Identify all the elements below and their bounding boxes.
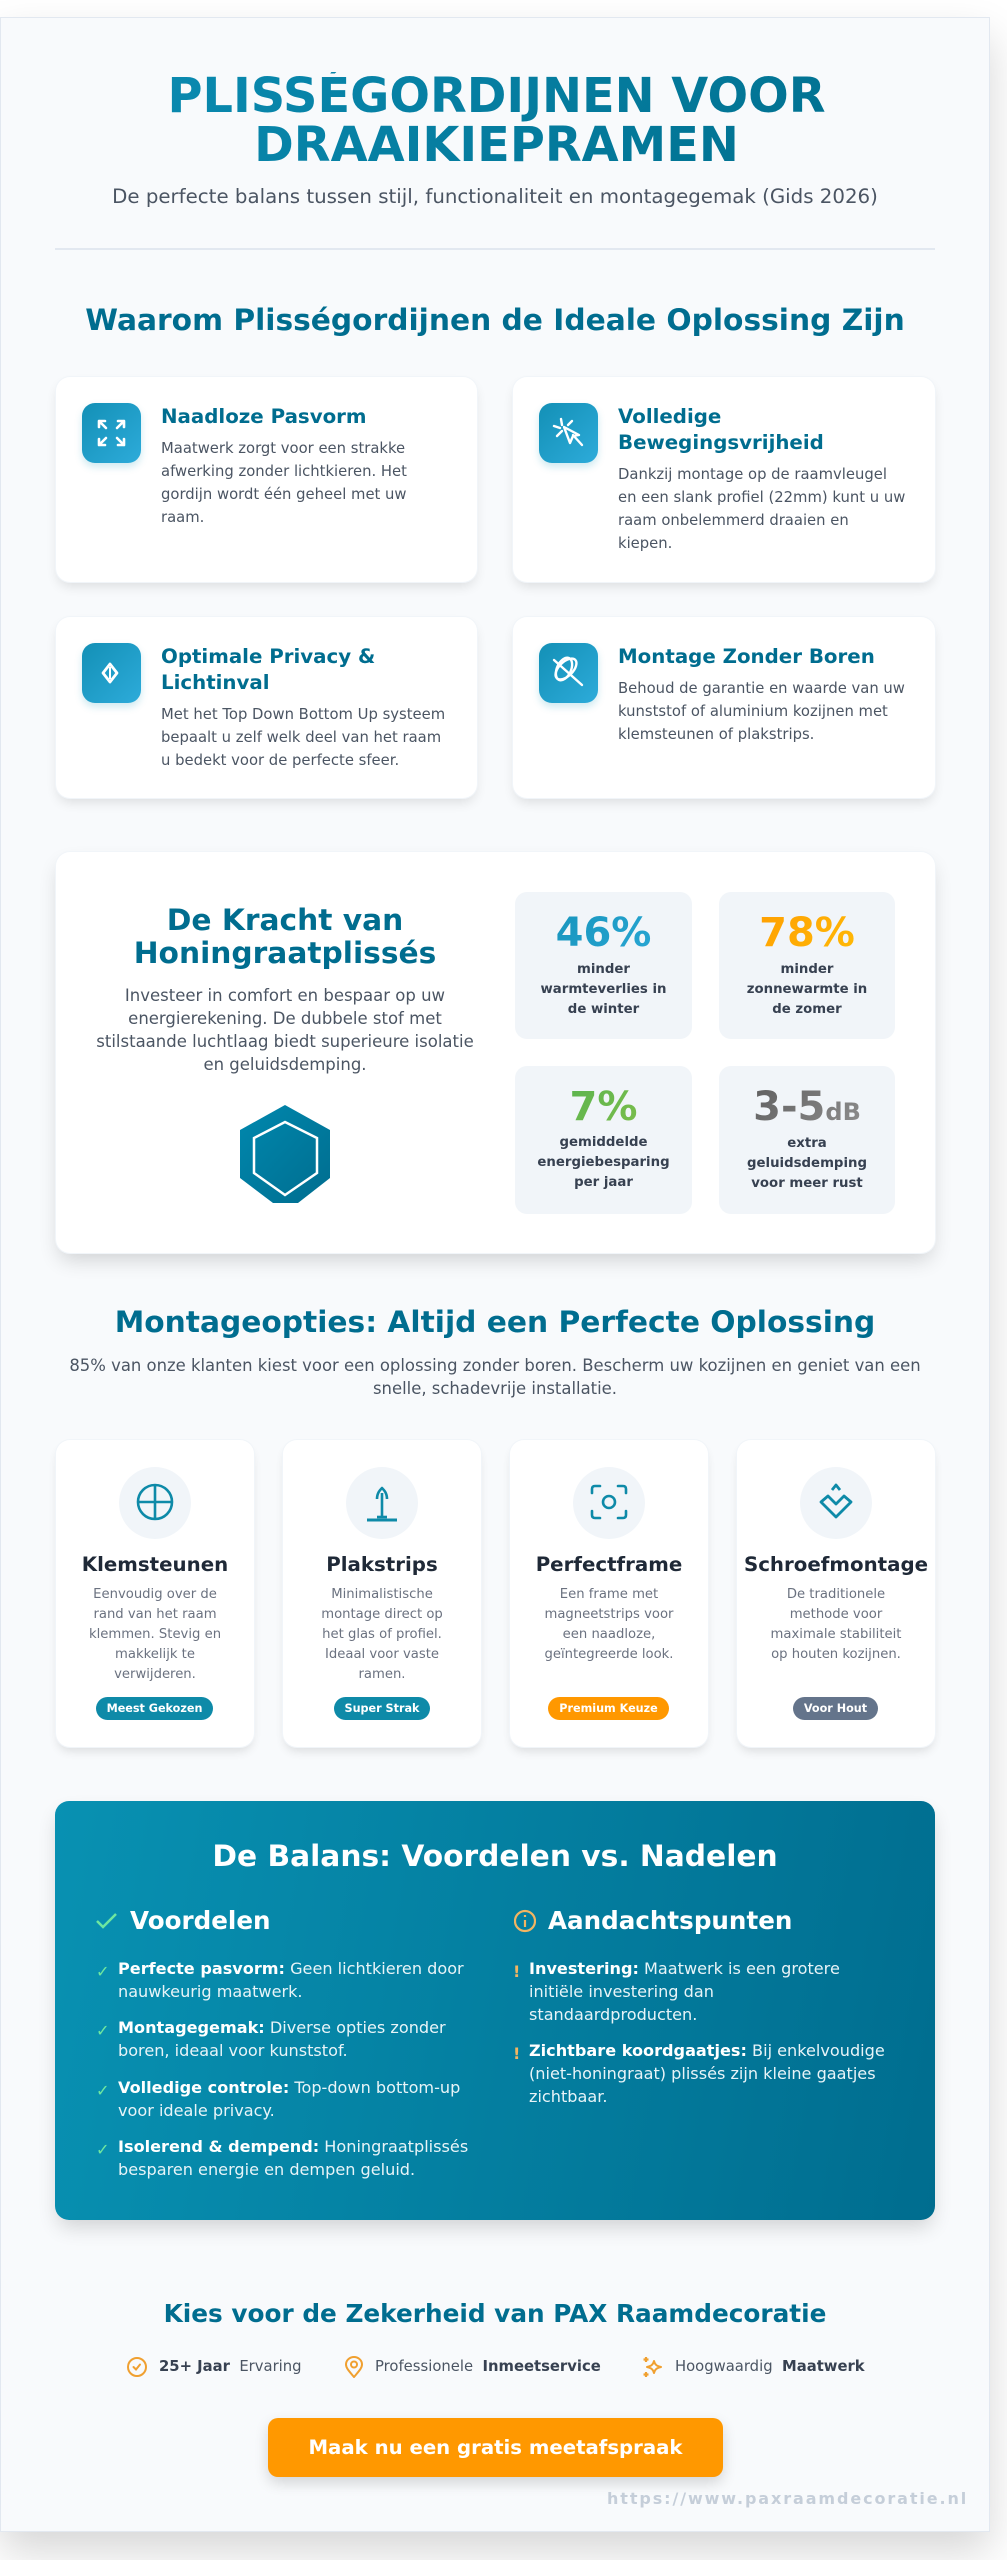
subtitle: De perfecte balans tussen stijl, functionaliteit en montagegemak (Gids 2026) bbox=[112, 185, 878, 208]
panel: honingraat bbox=[56, 852, 935, 1253]
badge bbox=[548, 1697, 669, 1720]
panel: voordelen en nadelen bbox=[55, 1801, 935, 2220]
trust item: maatwerk: Hoogwaardig Maatwerk bbox=[675, 2358, 865, 2375]
icon: screw bbox=[800, 1467, 872, 1539]
text: montage intro bbox=[69, 1356, 921, 1398]
badge bbox=[96, 1697, 213, 1720]
description: Minimalistische bbox=[331, 1587, 433, 1602]
text: volledige bewegingsvrijheid: en een slank profiel (22mm) kunt u uw bbox=[618, 488, 905, 506]
button: call to action: Maak nu een gratis meetafspraak bbox=[308, 2436, 683, 2459]
heading: montageopties: Montageopties: Altijd een Perfecte Oplossing bbox=[115, 1305, 875, 1340]
description bbox=[544, 1587, 674, 1662]
stat: 78%: zonnewarmte in bbox=[747, 982, 867, 997]
card: montage zonder boren bbox=[513, 617, 935, 798]
card: plakstrips bbox=[283, 1440, 481, 1747]
icon: link slash bbox=[539, 643, 598, 703]
badge: Voor Hout bbox=[804, 1702, 867, 1715]
name: Perfectframe bbox=[536, 1553, 682, 1576]
name: Klemsteunen bbox=[82, 1553, 228, 1576]
icon: info bbox=[514, 1910, 536, 1932]
icon: clamp circle bbox=[119, 1467, 191, 1539]
list item: (niet-honingraat) plissés zijn kleine gaatjes bbox=[529, 2064, 876, 2083]
icon: strip bbox=[346, 1467, 418, 1539]
description: maximale stabiliteit bbox=[771, 1627, 901, 1642]
icon: cursor click bbox=[539, 403, 598, 463]
name: Schroefmontage bbox=[744, 1553, 928, 1576]
text: naadloze pasvorm: gordijn wordt één geheel met uw bbox=[161, 486, 407, 502]
description bbox=[89, 1587, 221, 1682]
text: investeer: Investeer in comfort en bespaar op uw bbox=[125, 986, 445, 1005]
description bbox=[771, 1587, 902, 1662]
panel: voordelen en nadelen: ! bbox=[513, 2044, 520, 2063]
text: investeer: stilstaande luchtlaag biedt superieure isolatie bbox=[96, 1032, 474, 1051]
heading: de kracht van honingraatplissés: Honingraatplissés bbox=[134, 936, 436, 971]
heading: waarom: Waarom Plisségordijnen de Ideale Oplossing Zijn bbox=[85, 303, 905, 338]
text: montage zonder boren: klemsteunen of plakstrips. bbox=[618, 726, 814, 742]
text: montage zonder boren bbox=[618, 645, 905, 742]
description: methode voor bbox=[790, 1607, 882, 1622]
text: optimale privacy: u bedekt voor de perfecte sfeer. bbox=[161, 752, 399, 768]
description: montage direct op bbox=[321, 1607, 443, 1622]
stat: 46%: minder bbox=[577, 962, 630, 977]
badge: Premium Keuze bbox=[559, 1702, 658, 1715]
stat: 78%: de zomer bbox=[772, 1002, 842, 1017]
description: Een frame met bbox=[560, 1587, 658, 1602]
stat: 3-5 dB: 3-5dB bbox=[753, 1084, 861, 1130]
description: klemmen. Stevig en bbox=[89, 1627, 221, 1642]
text: volledige bewegingsvrijheid: Dankzij montage op de raamvleugel bbox=[618, 466, 887, 482]
text: naadloze pasvorm bbox=[161, 405, 407, 526]
trust item: inmeetservice: Professionele Inmeetservice bbox=[375, 2358, 601, 2375]
stat: 7%: energiebesparing bbox=[537, 1155, 670, 1170]
name: Plakstrips bbox=[326, 1553, 438, 1576]
button: call to action bbox=[268, 2418, 723, 2477]
description: een naadloze, bbox=[563, 1627, 655, 1642]
card: schroefmontage bbox=[737, 1440, 935, 1747]
heading: aandachtspunten: Aandachtspunten bbox=[548, 1906, 792, 1935]
icon: frame bbox=[573, 1467, 645, 1539]
stat: 3-5 dB: voor meer rust bbox=[751, 1176, 863, 1191]
title: DRAAIKIEPRAMEN bbox=[254, 118, 739, 173]
description: Eenvoudig over de bbox=[93, 1587, 217, 1602]
stat: 46% bbox=[515, 892, 692, 1039]
card: volledige bewegingsvrijheid bbox=[513, 377, 935, 582]
text: montage intro: 85% van onze klanten kiest voor een oplossing zonder boren. Bescherm uw kozijnen en geniet van een bbox=[69, 1356, 921, 1375]
list item: standaardproducten. bbox=[529, 2005, 697, 2024]
stat: 7%: 7% bbox=[570, 1084, 637, 1130]
list item: voor ideale privacy. bbox=[118, 2101, 275, 2120]
heading: de balans: De Balans: Voordelen vs. Nadelen bbox=[212, 1839, 778, 1874]
trust item: ervaring bbox=[127, 2357, 302, 2377]
description: op houten kozijnen. bbox=[771, 1647, 901, 1662]
text: investeer bbox=[96, 986, 474, 1074]
stat: 78% bbox=[719, 892, 895, 1039]
description: Ideaal voor vaste bbox=[325, 1647, 439, 1662]
text: montage zonder boren: Behoud de garantie en waarde van uw bbox=[618, 680, 905, 696]
icon: hexagon bbox=[240, 1105, 330, 1203]
text: optimale privacy: Lichtinval bbox=[161, 671, 270, 694]
list item: Zichtbare koordgaatjes: Bij enkelvoudige bbox=[529, 2041, 885, 2060]
list item: initiële investering dan bbox=[529, 1982, 714, 2001]
list item: nauwkeurig maatwerk. bbox=[118, 1982, 303, 2001]
list item: zichtbaar. bbox=[529, 2087, 607, 2106]
panel: voordelen en nadelen: ✓ bbox=[96, 1962, 110, 1981]
card: klemsteunen bbox=[56, 1440, 254, 1747]
description bbox=[321, 1587, 443, 1682]
stat: 78%: 78% bbox=[759, 910, 855, 956]
list item bbox=[513, 1959, 840, 2024]
list item: Investering: Maatwerk is een grotere bbox=[529, 1959, 840, 1978]
stat: 78%: minder bbox=[780, 962, 833, 977]
text: volledige bewegingsvrijheid: Bewegingsvrijheid bbox=[618, 431, 824, 454]
text: naadloze pasvorm: raam. bbox=[161, 508, 204, 526]
text: optimale privacy: bepaalt u zelf welk deel van het raam bbox=[161, 728, 441, 746]
list item: Volledige controle: Top-down bottom-up bbox=[118, 2078, 460, 2097]
description: De traditionele bbox=[787, 1587, 885, 1602]
panel: voordelen en nadelen: ✓ bbox=[96, 2021, 110, 2040]
text: naadloze pasvorm: afwerking zonder lichtkieren. Het bbox=[161, 462, 407, 480]
badge bbox=[334, 1697, 430, 1720]
badge: Super Strak bbox=[345, 1702, 419, 1715]
text: optimale privacy: Met het Top Down Bottom Up systeem bbox=[161, 706, 445, 722]
icon: sparkles bbox=[644, 2357, 662, 2377]
heading: de kracht van honingraatplissés bbox=[134, 903, 436, 971]
heading: voordelen: Voordelen bbox=[130, 1906, 271, 1935]
list item: Montagegemak: Diverse opties zonder bbox=[118, 2018, 446, 2037]
description: magneetstrips voor bbox=[544, 1607, 673, 1622]
description: verwijderen. bbox=[114, 1667, 196, 1682]
text: optimale privacy: Optimale Privacy & bbox=[161, 645, 375, 668]
heading: kies voor de zekerheid: Kies voor de Zekerheid van PAX Raamdecoratie bbox=[164, 2299, 826, 2328]
list item: boren, ideaal voor kunststof. bbox=[118, 2041, 348, 2060]
text: volledige bewegingsvrijheid: Volledige bbox=[618, 405, 721, 428]
description: geïntegreerde look. bbox=[544, 1647, 674, 1662]
card: naadloze pasvorm bbox=[56, 377, 477, 582]
card: optimale privacy bbox=[56, 617, 477, 798]
panel: voordelen en nadelen: ! bbox=[513, 1962, 520, 1981]
stat: 46%: de winter bbox=[568, 1002, 639, 1017]
stat: 7%: gemiddelde bbox=[559, 1135, 648, 1150]
description: makkelijk te bbox=[115, 1647, 195, 1662]
badge: Meest Gekozen bbox=[107, 1702, 202, 1715]
icon: location pin bbox=[345, 2356, 363, 2378]
description: ramen. bbox=[358, 1667, 406, 1682]
trust item: inmeetservice bbox=[345, 2356, 601, 2378]
stat: 46%: 46% bbox=[556, 910, 651, 956]
list item: Isolerend & dempend: Honingraatplissés bbox=[118, 2137, 468, 2156]
stat: 3-5 dB: extra bbox=[787, 1136, 827, 1151]
description: het glas of profiel. bbox=[322, 1627, 442, 1642]
list item bbox=[513, 2041, 885, 2106]
text: investeer: en geluidsdemping. bbox=[203, 1055, 367, 1074]
text: optimale privacy bbox=[161, 645, 445, 768]
list item bbox=[96, 1959, 464, 2001]
stat: 3-5 dB bbox=[719, 1066, 895, 1214]
panel: voordelen en nadelen: ✓ bbox=[96, 2081, 110, 2100]
text: montage zonder boren: kunststof of aluminium kozijnen met bbox=[618, 702, 888, 720]
icon: diamond bbox=[82, 643, 141, 703]
title bbox=[150, 72, 843, 170]
trust item: ervaring: 25+ Jaar Ervaring bbox=[159, 2358, 302, 2375]
icon: expand arrows bbox=[82, 403, 141, 463]
badge bbox=[793, 1697, 878, 1720]
heading: de kracht van honingraatplissés: De Kracht van bbox=[167, 903, 403, 938]
list item bbox=[96, 2078, 460, 2120]
text: montage zonder boren: Montage Zonder Boren bbox=[618, 645, 875, 668]
panel: voordelen en nadelen: ✓ bbox=[96, 2140, 110, 2159]
icon: check badge bbox=[127, 2357, 147, 2377]
list item: Perfecte pasvorm: Geen lichtkieren door bbox=[118, 1959, 464, 1978]
text: volledige bewegingsvrijheid bbox=[618, 405, 905, 552]
description: rand van het raam bbox=[93, 1607, 217, 1622]
text: volledige bewegingsvrijheid: kiepen. bbox=[618, 534, 672, 552]
stat: 7% bbox=[515, 1066, 692, 1214]
text: montage intro: snelle, schadevrije installatie. bbox=[373, 1379, 617, 1398]
stat: 46%: warmteverlies in bbox=[540, 982, 666, 997]
text: investeer: energierekening. De dubbele stof met bbox=[128, 1009, 442, 1028]
title: PLISSÉGORDIJNEN VOOR bbox=[167, 69, 826, 124]
watermark url: https://www.paxraamdecoratie.nl bbox=[607, 2489, 968, 2508]
stat: 7%: per jaar bbox=[574, 1175, 633, 1190]
stat: 3-5 dB: geluidsdemping bbox=[747, 1156, 867, 1171]
list item bbox=[96, 2018, 446, 2060]
text: naadloze pasvorm: Maatwerk zorgt voor een strakke bbox=[161, 440, 405, 456]
text: naadloze pasvorm: Naadloze Pasvorm bbox=[161, 405, 367, 428]
list item bbox=[96, 2137, 468, 2179]
icon: check bbox=[96, 1913, 117, 1929]
list item: besparen energie en dempen geluid. bbox=[118, 2160, 415, 2179]
text: volledige bewegingsvrijheid: raam onbelemmerd draaien en bbox=[618, 512, 849, 528]
card: perfectframe bbox=[510, 1440, 708, 1747]
